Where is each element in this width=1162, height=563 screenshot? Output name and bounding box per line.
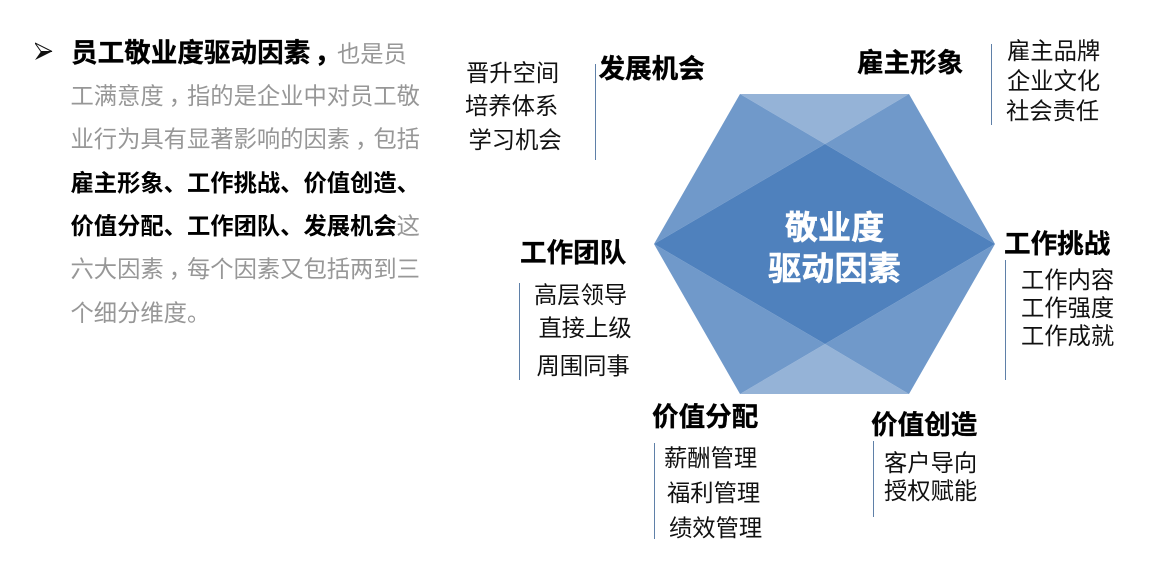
panel: 工作团队: 周围同事 xyxy=(536,353,630,379)
description line 4: 雇主形象、工作挑战、价值创造、 xyxy=(70,170,420,196)
panel: 工作挑战 xyxy=(1004,229,1114,380)
panel: 价值分配: 福利管理 xyxy=(667,480,760,506)
items: 工作内容 xyxy=(1021,267,1114,293)
hexagon title: 敬业度 xyxy=(785,210,884,247)
description line 2: 工满意度，指的是企业中对员工敬 xyxy=(70,83,420,109)
description line 1: 员工敬业度驱动因素，也是员 xyxy=(71,38,407,68)
panel: 价值分配 xyxy=(652,402,762,541)
panel: 工作团队 xyxy=(519,238,632,380)
heading: 雇主形象 xyxy=(857,48,963,78)
panel: 发展机会: 学习机会 xyxy=(468,127,562,153)
items: 晋升空间 xyxy=(466,60,559,86)
items: 薪酬管理 xyxy=(664,445,757,471)
panel: 发展机会: 培养体系 xyxy=(465,93,558,119)
panel: 工作团队: 直接上级 xyxy=(538,315,632,341)
description line 3: 业行为具有显著影响的因素，包括 xyxy=(70,126,420,152)
hexagon title: 驱动因素 xyxy=(768,251,901,288)
panel: 工作挑战: 工作成就 xyxy=(1021,323,1114,349)
panel: 雇主形象 xyxy=(857,38,1100,125)
panel: 价值分配: 绩效管理 xyxy=(669,515,762,541)
panel: description text xyxy=(35,38,420,326)
heading: 工作团队 xyxy=(520,238,626,268)
hexagon title xyxy=(768,210,901,288)
panel: 雇主形象: 企业文化 xyxy=(1007,68,1100,94)
panel: 工作挑战: 工作强度 xyxy=(1021,295,1114,321)
heading: 工作挑战 xyxy=(1004,229,1110,259)
heading: 价值创造 xyxy=(871,410,977,440)
description line 7: 个细分维度。 xyxy=(70,300,210,326)
description line 6: 六大因素，每个因素又包括两到三 xyxy=(70,256,420,282)
panel: 雇主形象: 社会责任 xyxy=(1006,98,1099,124)
items: 客户导向 xyxy=(884,450,977,476)
heading: 发展机会 xyxy=(598,54,705,84)
description line 5: 价值分配、工作团队、发展机会这 xyxy=(70,213,420,239)
panel: 价值创造 xyxy=(871,410,978,517)
panel: 发展机会 xyxy=(465,54,705,160)
items: 高层领导 xyxy=(534,282,627,308)
panel: 价值创造: 授权赋能 xyxy=(884,478,977,504)
heading: 价值分配 xyxy=(652,402,758,432)
icon: arrow bullet xyxy=(35,42,52,60)
items: 雇主品牌 xyxy=(1007,38,1100,64)
chart: central hexagon xyxy=(654,94,995,394)
